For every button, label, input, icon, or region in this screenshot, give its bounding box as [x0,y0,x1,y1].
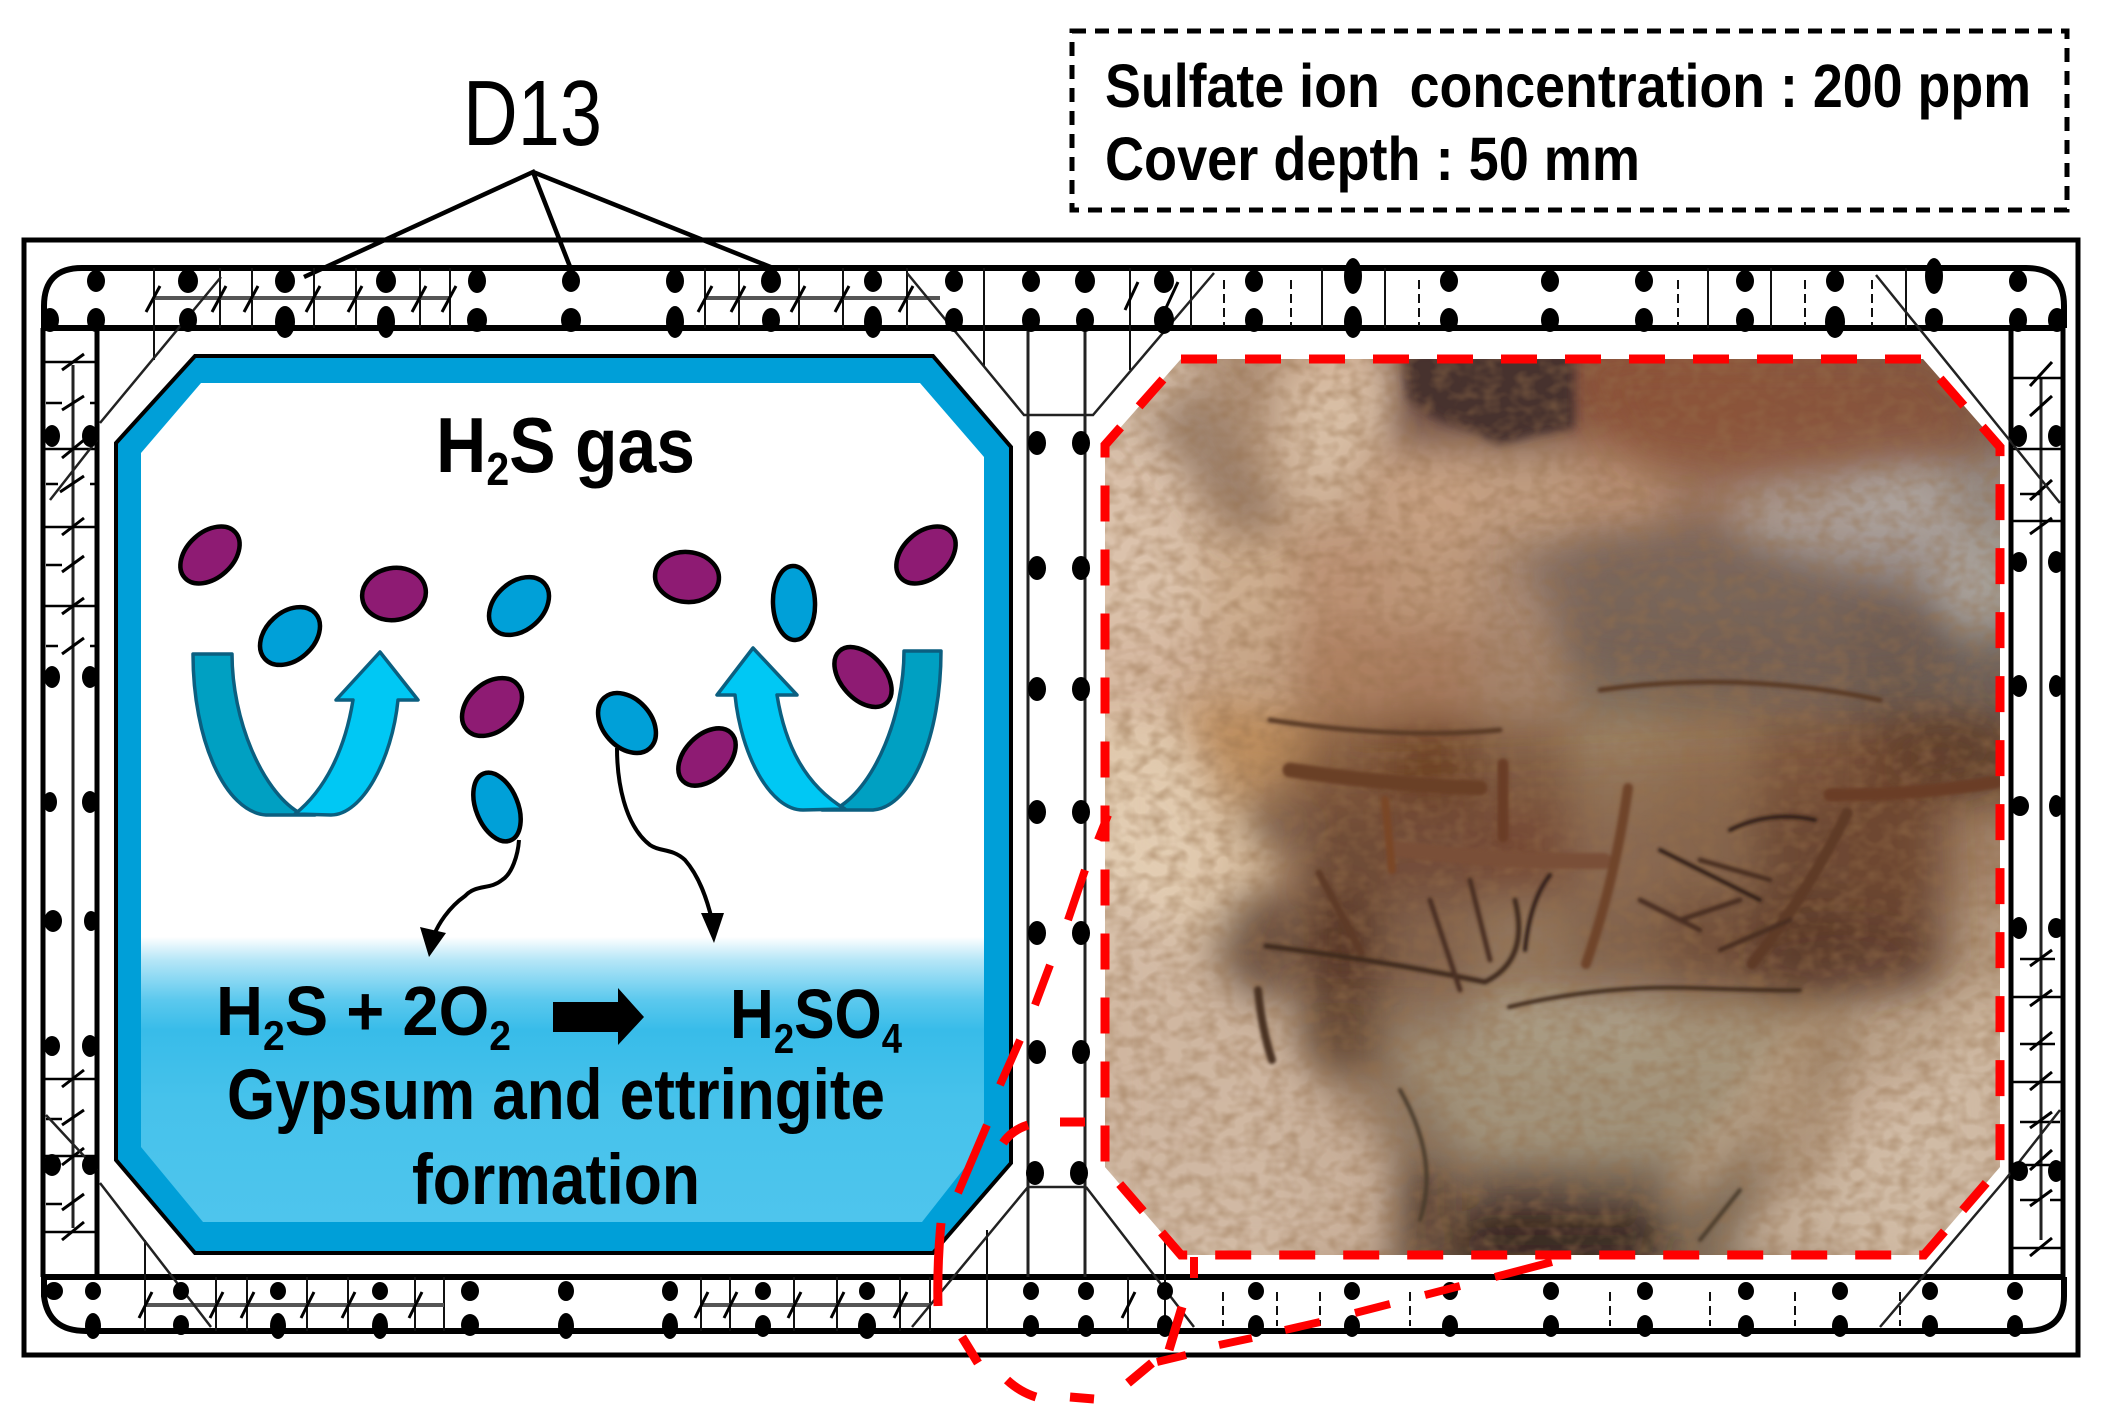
photo dark patch [1402,350,1574,445]
chamber interior [141,383,984,1222]
photo colour field [1105,359,2000,1255]
conditions callout box [1072,31,2067,210]
outer section frame [24,240,2078,1355]
chamber blue wall [116,356,1011,1253]
cover depth text: Cover depth : 50 mm [1105,125,1640,193]
corroded rebar [1258,682,1996,1240]
panel: H2S gas chamber [116,356,1011,1253]
text: formation: formation [412,1141,700,1220]
centre wall rebar dots [1026,431,1090,1185]
arrow: molecule to water right [617,748,724,943]
equation right side: H [730,975,781,1053]
equation right side: SO [794,975,882,1053]
bottom rebar dots [45,1281,2023,1339]
zoom callout leader lines [958,815,1552,1362]
arrow: reaction [553,988,644,1045]
purple gas molecules [169,515,967,797]
photo tonal regions [1106,358,2010,1265]
side wall rebar dots [43,425,2064,1182]
icon: right circulation arrow [717,648,941,810]
icon: left circulation arrow [193,652,418,815]
photo red dashed outline [1105,359,2000,1255]
reinforcement cage drawing [41,258,2066,1339]
text: gypsum and ettringite: Gypsum and ettringite [227,1056,885,1135]
blue gas molecules [249,565,816,848]
equation left side: 2 [263,1012,285,1059]
equation right side: 4 [882,1015,903,1062]
zoom callout circle [938,1122,1182,1399]
photo surface mottling [1105,358,2000,1255]
equation left side: H [216,972,267,1050]
equation left side: 2 [489,1012,511,1059]
panel: corroded concrete photo [1105,359,2000,1255]
D13 label: D13 [463,61,602,165]
equation right side: 2 [774,1015,794,1062]
heading: H2S gas: H [436,401,492,489]
equation left side: S + 2O [285,972,489,1050]
top rebar dots [41,258,2066,338]
heading: H2S gas: S gas [509,401,695,489]
D13 leader lines [304,172,773,277]
heading: H2S gas: 2 [486,443,509,495]
arrow: molecule to water left [420,840,519,957]
